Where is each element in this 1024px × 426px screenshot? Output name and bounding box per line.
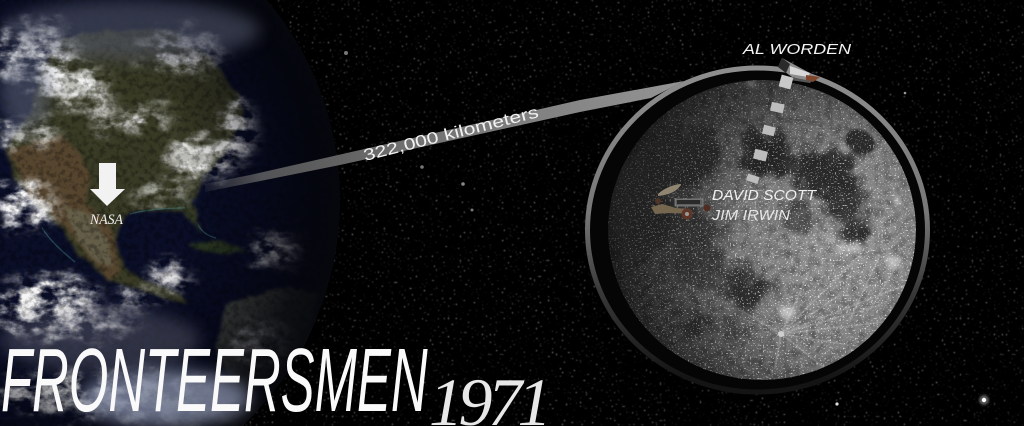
- crater mottling: [608, 80, 917, 380]
- land masses: North and Central America: [5, 30, 320, 390]
- Earth globe: [0, 0, 345, 426]
- orbit backing dark band: [588, 69, 926, 391]
- lunar maria: [610, 128, 872, 336]
- coastal shallows: [42, 208, 216, 262]
- ray craters: [740, 255, 905, 372]
- cloud systems: [0, 25, 304, 425]
- rover antenna dish: [658, 184, 681, 196]
- Mare Crisium: [844, 128, 876, 156]
- Moon: [608, 80, 917, 380]
- day-night shading: [0, 0, 340, 426]
- atmospheric haze: [0, 0, 260, 426]
- icon: lunar rover and antenna: [651, 184, 710, 220]
- orbit ring: [588, 68, 928, 392]
- Tycho crater: [778, 331, 784, 337]
- bright crust specks: [608, 80, 917, 380]
- signal dashes: [746, 75, 793, 184]
- label: distance: 322,000 kilometers: [362, 103, 540, 165]
- label: NASA: NASA: [89, 212, 123, 228]
- icon: command module spacecraft: [778, 58, 820, 83]
- rover wheels: [682, 208, 692, 220]
- label: DAVID SCOTT: DAVID SCOTT: [712, 188, 817, 204]
- fine terrain mottling: [0, 0, 296, 426]
- distance beam: [205, 81, 684, 192]
- bright highland patches: [746, 82, 900, 319]
- label: AL WORDEN: AL WORDEN: [742, 41, 851, 58]
- rover body: [675, 199, 703, 206]
- arrow: NASA location: [90, 163, 125, 206]
- label: JIM IRWIN: JIM IRWIN: [711, 208, 791, 224]
- thick white clouds: [0, 78, 216, 281]
